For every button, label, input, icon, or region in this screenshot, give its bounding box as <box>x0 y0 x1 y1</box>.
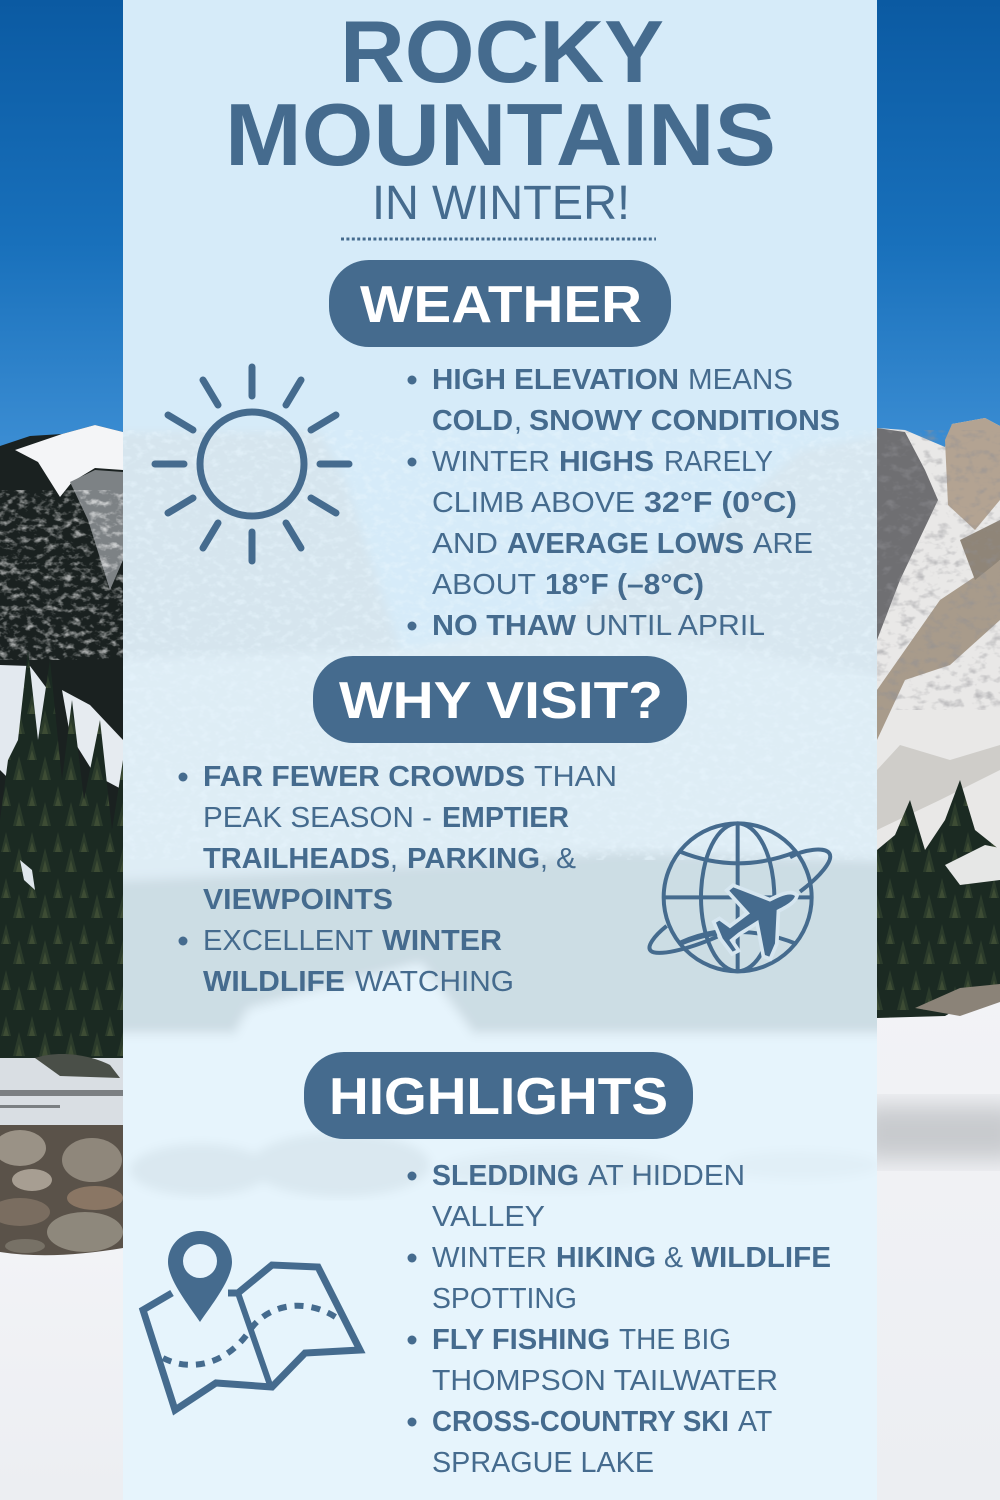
right mountain <box>877 418 1000 1025</box>
center of photo behind panel <box>100 0 900 1500</box>
weather bullet list: AVERAGE LOWS <box>507 528 744 560</box>
why visit bullet list: EMPTIER <box>442 802 569 834</box>
why visit bullet list: & <box>556 843 576 875</box>
title <box>225 2 776 239</box>
pin <box>168 1231 232 1322</box>
why visit bullet list: PARKING <box>407 843 540 875</box>
heading pill: weather: WEATHER <box>360 276 642 334</box>
why visit bullet list: PEAK SEASON - <box>203 802 432 834</box>
weather bullet list: HIGH ELEVATION <box>432 364 679 396</box>
why visit bullet list: WATCHING <box>355 966 514 998</box>
highlights bullet list: SPRAGUE LAKE <box>432 1447 654 1479</box>
highlights bullet list: FLY FISHING <box>432 1324 610 1356</box>
weather bullet list: NO THAW <box>432 610 576 642</box>
why visit bullet list <box>178 761 617 998</box>
plane <box>716 887 795 957</box>
highlights bullet list: THE BIG <box>619 1324 731 1356</box>
weather bullet list: WINTER <box>432 446 550 478</box>
why visit bullet list: EXCELLENT <box>203 925 373 957</box>
highlights bullet list: WINTER <box>432 1242 547 1274</box>
highlights bullet list: SPOTTING <box>432 1283 577 1315</box>
left ground: ice, rocks, snow <box>0 1054 123 1500</box>
weather bullet list: CLIMB ABOVE <box>432 487 635 519</box>
title line: MOUNTAINS: MOUNTAINS <box>225 85 776 184</box>
why visit bullet list: VIEWPOINTS <box>203 884 393 916</box>
heading pill: highlights <box>304 1052 693 1139</box>
highlights bullet list: WILDLIFE <box>691 1242 831 1274</box>
highlights bullet list: SLEDDING <box>432 1160 579 1192</box>
weather bullet list: , <box>514 405 522 437</box>
why visit bullet list: TRAILHEADS <box>203 843 390 875</box>
icon: globe with plane <box>650 823 830 971</box>
highlights bullet list: CROSS-COUNTRY SKI <box>432 1406 729 1438</box>
why visit bullet list: FAR FEWER CROWDS <box>203 761 525 793</box>
why visit bullet list: THAN <box>534 761 617 793</box>
weather bullet list: 32°F (0°C) <box>644 487 797 519</box>
weather bullet list: ABOUT <box>432 569 536 601</box>
weather bullet list: COLD <box>432 405 513 437</box>
subtitle: IN WINTER!: IN WINTER! <box>372 177 630 230</box>
highlights bullet list: AT HIDDEN <box>588 1160 745 1192</box>
highlights bullet list <box>408 1160 831 1479</box>
weather bullet list: RARELY <box>664 446 773 478</box>
highlights bullet list: THOMPSON TAILWATER <box>432 1365 778 1397</box>
weather bullet list: 18°F (–8°C) <box>545 569 704 601</box>
heading pill: why visit: WHY VISIT? <box>339 672 663 730</box>
heading pill: highlights: HIGHLIGHTS <box>329 1068 668 1126</box>
why visit bullet list: WILDLIFE <box>203 966 345 998</box>
translucent central panel <box>123 0 877 1500</box>
weather bullet list: AND <box>432 528 498 560</box>
why visit bullet list: , <box>540 843 548 875</box>
title line: ROCKY: ROCKY <box>340 2 664 101</box>
right snowfield <box>877 984 1000 1500</box>
weather bullet list: SNOWY CONDITIONS <box>529 405 840 437</box>
weather bullet list: UNTIL APRIL <box>585 610 765 642</box>
heading pill: why visit <box>313 656 687 743</box>
icon: map with location pin <box>143 1231 360 1410</box>
highlights bullet list: AT <box>738 1406 772 1438</box>
heading pill: weather <box>329 260 671 347</box>
why visit bullet list: , <box>390 843 398 875</box>
highlights bullet list: & <box>664 1242 683 1274</box>
left mountain <box>0 425 123 1075</box>
highlights bullet list: HIKING <box>556 1242 656 1274</box>
icon: sun <box>155 367 349 561</box>
highlights bullet list: VALLEY <box>432 1201 545 1233</box>
weather bullet list <box>408 364 840 642</box>
why visit bullet list: WINTER <box>382 925 502 957</box>
weather bullet list: MEANS <box>688 364 793 396</box>
weather bullet list: ARE <box>753 528 813 560</box>
weather bullet list: HIGHS <box>559 446 654 478</box>
